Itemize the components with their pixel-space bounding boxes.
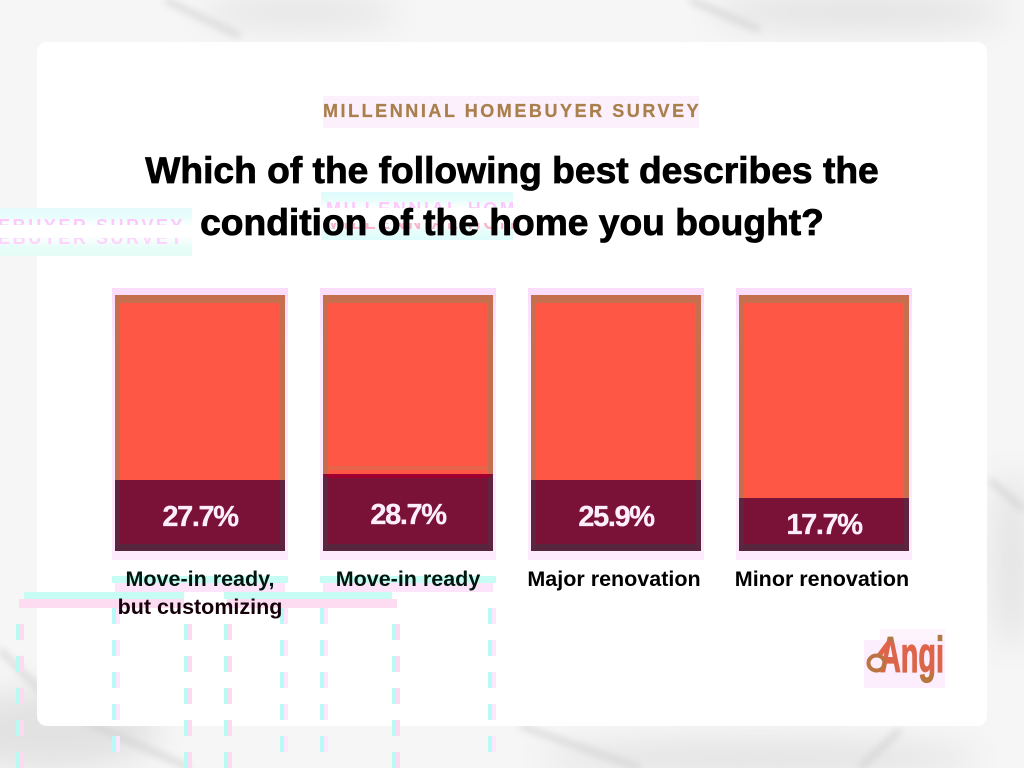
label: major renovation: Major renovation — [527, 567, 701, 591]
label: move-in ready, but customizing — [118, 567, 282, 619]
bar: minor renovation 17.7% — [736, 288, 912, 560]
title: condition of the home you bought? — [200, 201, 824, 243]
bar: minor renovation 17.7%: 17.7% — [786, 509, 862, 541]
bar: move-in ready 28.7%: 28.7% — [370, 499, 446, 531]
bar: major renovation 25.9%: 25.9% — [578, 501, 654, 533]
label: move-in ready: Move-in ready — [336, 567, 480, 591]
title — [144, 149, 879, 243]
bar: move-in ready, but customizing 27.7% — [112, 288, 288, 560]
bar: major renovation 25.9% — [528, 288, 704, 560]
label: move-in ready, but customizing: but customizing — [118, 595, 282, 619]
bar: move-in ready, but customizing 27.7%: 27.7% — [162, 501, 238, 533]
label: minor renovation: Minor renovation — [735, 567, 909, 591]
label: move-in ready, but customizing: Move-in ready, — [126, 567, 274, 591]
compression ghost: centre survey text — [321, 192, 513, 240]
eyebrow heading — [323, 96, 699, 128]
compression ghost: dashed guides — [16, 576, 496, 768]
compression ghost: left survey text — [0, 208, 192, 256]
eyebrow heading: MILLENNIAL HOMEBUYER SURVEY — [323, 101, 701, 121]
title: Which of the following best describes the — [145, 149, 879, 191]
bar: move-in ready 28.7% — [320, 288, 496, 560]
